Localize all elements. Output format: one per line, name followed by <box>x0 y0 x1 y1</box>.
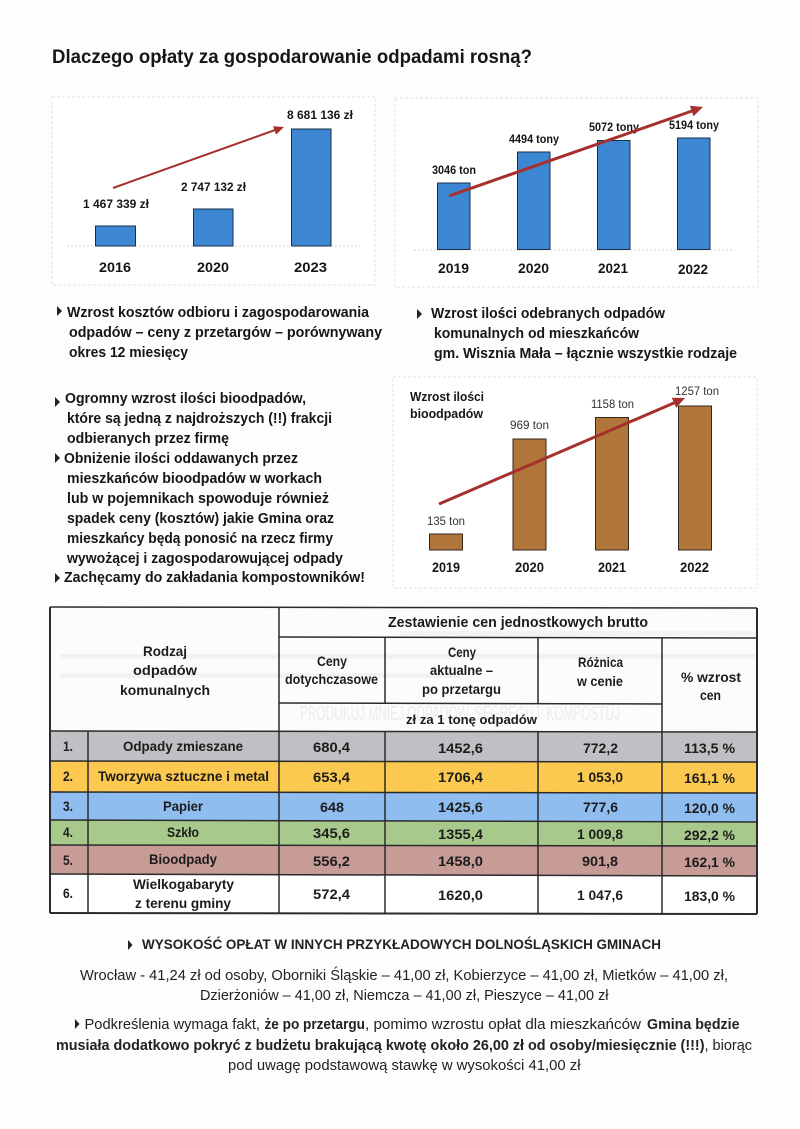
bar 2021 <box>589 122 640 276</box>
bar 2019 <box>432 165 476 276</box>
text block: bioodpady: spadek ceny (kosztów) jakie Gmina oraz <box>67 511 334 527</box>
text block: podsumowanie: , biorąc <box>704 1038 752 1054</box>
row 5: bioodpady: 901,8 <box>582 853 618 869</box>
bar 2020 <box>510 420 549 575</box>
bar 2023: 8 681 136 zł <box>287 110 354 122</box>
bar 2020: 2 747 132 zł <box>181 182 247 194</box>
bar chart: koszty odbioru <box>52 97 375 285</box>
header: ceny aktualne: aktualne – <box>430 662 493 678</box>
text block: bioodpady: odbieranych przez firmę <box>67 431 229 447</box>
text block: ilość odpadów <box>417 306 737 362</box>
bar 2020: 4494 tony <box>509 134 560 146</box>
row 2: tworzywa sztuczne i metal: 653,4 <box>313 769 350 785</box>
row 5: bioodpady: Bioodpady <box>149 851 217 867</box>
bar 2021: 2021 <box>598 260 628 276</box>
row 6: wielkogabaryty: 1620,0 <box>438 887 483 903</box>
text block: podsumowanie: musiała dodatkowo pokryć z budżetu brakującą kwotę około 26,00 zł od osoby/miesięcznie (!!!) <box>56 1038 705 1054</box>
text block: podsumowanie: pod uwagę podstawową stawkę w wysokości 41,00 zł <box>228 1058 581 1074</box>
bar 2016 <box>83 199 150 275</box>
arrow: trend <box>439 398 685 504</box>
row 1: odpady zmieszane <box>50 731 757 762</box>
header: rodzaj odpadów: komunalnych <box>120 682 210 698</box>
text block: podsumowanie: , pomimo wzrostu opłat dla mieszkańców <box>365 1017 642 1033</box>
bar 2022: 5194 tony <box>669 120 720 132</box>
row 2: tworzywa sztuczne i metal: 1 053,0 <box>577 769 623 785</box>
row 2: tworzywa sztuczne i metal: 161,1 % <box>684 770 736 786</box>
text block: bioodpady <box>55 391 365 586</box>
row 6: wielkogabaryty: 572,4 <box>313 886 350 902</box>
header: ceny dotychczasowe: Ceny <box>317 653 347 669</box>
row 6: wielkogabaryty: 183,0 % <box>684 888 736 904</box>
text block: ilość odpadów: Wzrost ilości odebranych odpadów <box>431 306 666 322</box>
text block: bioodpady: Obniżenie ilości oddawanych przez <box>64 451 298 467</box>
header: różnica: Różnica <box>578 654 623 670</box>
row 6: wielkogabaryty: Wielkogabaryty <box>133 876 234 892</box>
text block: bioodpady: które są jedną z najdroższych (!!) frakcji <box>67 411 332 427</box>
bar 2016: 2016 <box>99 259 131 275</box>
row 1: odpady zmieszane: 1452,6 <box>438 740 483 756</box>
row 3: papier: 777,6 <box>583 799 618 815</box>
bar 2020 <box>181 182 247 275</box>
text block: bioodpady: mieszkańców bioodpadów w workach <box>67 471 322 487</box>
row 3: papier: 1425,6 <box>438 799 483 815</box>
row 5: bioodpady <box>50 845 757 876</box>
text block: lista gmin: Dzierżoniów – 41,00 zł, Niemcza – 41,00 zł, Pieszyce – 41,00 zł <box>200 988 609 1004</box>
header: ceny dotychczasowe: dotychczasowe <box>285 671 378 687</box>
bar 2022 <box>675 386 719 575</box>
bar 2020: 2020 <box>197 259 229 275</box>
row 1: odpady zmieszane: 113,5 % <box>684 740 736 756</box>
bar 2019 <box>427 516 465 575</box>
heading: opłaty w innych gminach: WYSOKOŚĆ OPŁAT W INNYCH PRZYKŁADOWYCH DOLNOŚLĄSKICH GMINACH <box>142 935 661 952</box>
text block: bioodpady: Zachęcamy do zakładania kompostowników! <box>64 570 365 586</box>
bar 2023: 2023 <box>294 259 327 275</box>
text block: podsumowanie: że po przetargu <box>264 1017 365 1033</box>
row 4: szkło: 345,6 <box>313 825 350 841</box>
row 2: tworzywa sztuczne i metal: Tworzywa sztuczne i metal <box>98 768 269 784</box>
row 4: szkło: Szkło <box>167 824 199 840</box>
bar 2019: 2019 <box>432 559 460 575</box>
bar 2020 <box>509 134 560 276</box>
row 2: tworzywa sztuczne i metal <box>50 761 757 793</box>
header: różnica: w cenie <box>576 673 623 689</box>
row 5: bioodpady: 1458,0 <box>438 853 483 869</box>
table: zestawienie cen <box>50 607 757 914</box>
row 5: bioodpady: 162,1 % <box>684 854 736 870</box>
text block: ilość odpadów: gm. Wisznia Mała – łącznie wszystkie rodzaje <box>434 346 737 362</box>
row 5: bioodpady: 556,2 <box>313 853 350 869</box>
header: ceny dotychczasowe <box>285 653 378 687</box>
row 3: papier: 3. <box>63 798 73 814</box>
row 3: papier: Papier <box>163 798 204 814</box>
chart heading <box>410 390 484 421</box>
text block: lista gmin <box>80 966 728 1004</box>
text block: bioodpady: wywożącej i zagospodarowującej odpady <box>66 551 343 567</box>
bar 2021 <box>591 399 634 575</box>
header: rodzaj odpadów <box>120 643 210 698</box>
title: Dlaczego opłaty za gospodarowanie odpadami rosną? <box>52 46 532 68</box>
chart heading: bioodpadów <box>410 407 483 421</box>
bar 2021: 2021 <box>598 559 626 575</box>
row 4: szkło: 292,2 % <box>684 827 736 843</box>
bar chart: wzrost ilości bioodpadów <box>393 377 757 588</box>
header: rodzaj odpadów: odpadów <box>133 662 197 678</box>
bar 2020: 2020 <box>518 260 549 276</box>
row 1: odpady zmieszane: Odpady zmieszane <box>123 738 243 754</box>
table header <box>120 615 741 727</box>
row 1: odpady zmieszane: 1. <box>63 738 73 754</box>
row 6: wielkogabaryty: z terenu gminy <box>135 895 231 911</box>
text block: koszty: okres 12 miesięcy <box>69 345 188 361</box>
bar 2021: 5072 tony <box>589 122 640 134</box>
text block: bioodpady: lub w pojemnikach spowoduje również <box>67 491 329 507</box>
chart heading: Wzrost ilości <box>410 390 484 404</box>
header: procent wzrostu <box>681 669 741 703</box>
row 6: wielkogabaryty: 1 047,6 <box>577 887 623 903</box>
bar 2022: 1257 ton <box>675 386 719 398</box>
header: procent wzrostu: cen <box>700 687 721 703</box>
header: ceny aktualne: po przetargu <box>422 681 501 697</box>
text block: podsumowanie: Podkreślenia wymaga fakt, <box>84 1017 260 1033</box>
text block: lista gmin: Wrocław - 41,24 zł od osoby, Oborniki Śląskie – 41,00 zł, Kobierzyce – 41,00 zł, Mietków – 41,00 zł, <box>80 966 728 984</box>
bar 2022 <box>669 120 720 277</box>
row 1: odpady zmieszane: 680,4 <box>313 739 350 755</box>
row 4: szkło <box>50 820 757 846</box>
row 4: szkło: 4. <box>63 824 73 840</box>
row 1: odpady zmieszane: 772,2 <box>583 740 618 756</box>
header: ceny aktualne: Ceny <box>448 644 476 660</box>
bar 2020: 969 ton <box>510 420 549 432</box>
header: jednostka: zł za 1 tonę odpadów <box>406 712 538 727</box>
header: ceny aktualne <box>422 644 501 697</box>
row 2: tworzywa sztuczne i metal: 2. <box>63 768 73 784</box>
text block: podsumowanie: Gmina będzie <box>647 1017 740 1033</box>
header: różnica <box>576 654 623 689</box>
row 3: papier: 648 <box>320 799 344 815</box>
bar 2020: 2020 <box>515 559 544 575</box>
arrow: trend <box>113 126 284 188</box>
row 6: wielkogabaryty <box>50 874 757 914</box>
text block: koszty: odpadów – ceny z przetargów – porównywany <box>69 325 382 341</box>
row 6: wielkogabaryty: 6. <box>63 885 73 901</box>
bar 2019: 3046 ton <box>432 165 476 177</box>
row 4: szkło: 1 009,8 <box>577 826 623 842</box>
bar 2021: 1158 ton <box>591 399 634 411</box>
bar 2022: 2022 <box>678 261 708 277</box>
text block: koszty: Wzrost kosztów odbioru i zagospodarowania <box>67 305 370 321</box>
row 4: szkło: 1355,4 <box>438 826 483 842</box>
row 5: bioodpady: 5. <box>63 852 73 868</box>
bar chart: ilość odebranych odpadów <box>395 98 758 287</box>
text block: koszty <box>57 305 382 361</box>
header: procent wzrostu: % wzrost <box>681 669 741 685</box>
text block: ilość odpadów: komunalnych od mieszkańców <box>434 326 640 342</box>
row 2: tworzywa sztuczne i metal: 1706,4 <box>438 769 483 785</box>
bar 2019: 135 ton <box>427 516 465 528</box>
bar 2019: 2019 <box>438 260 469 276</box>
bar 2022: 2022 <box>680 559 709 575</box>
arrow: trend <box>449 106 703 196</box>
bar 2023 <box>287 110 354 275</box>
text block: podsumowanie <box>56 1017 752 1074</box>
text block: bioodpady: mieszkańcy będą ponosić na rzecz firmy <box>67 531 333 547</box>
row 3: papier <box>50 792 757 822</box>
header: zestawienie: Zestawienie cen jednostkowych brutto <box>388 615 648 631</box>
text block: bioodpady: Ogromny wzrost ilości bioodpadów, <box>65 391 306 407</box>
header: rodzaj odpadów: Rodzaj <box>143 643 187 659</box>
bar 2016: 1 467 339 zł <box>83 199 150 211</box>
row 3: papier: 120,0 % <box>684 800 736 816</box>
